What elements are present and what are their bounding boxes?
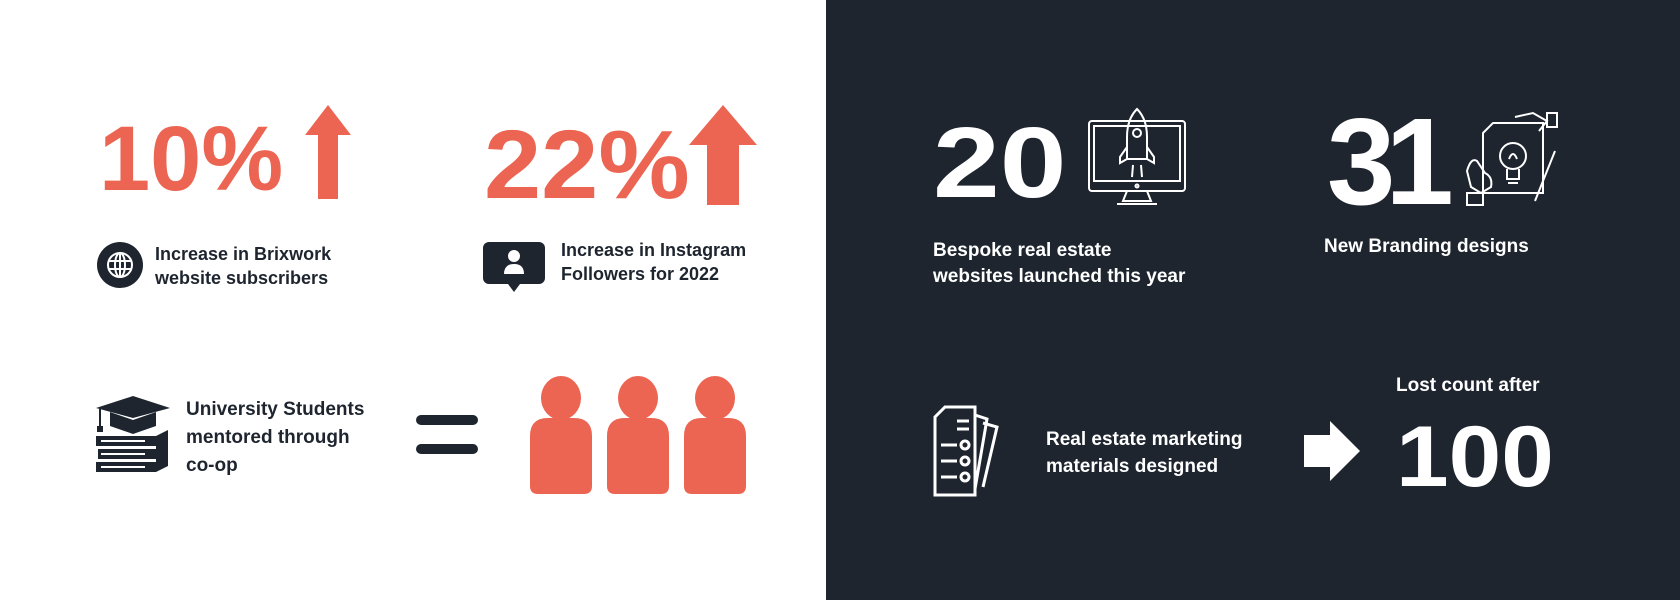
icon: three people bbox=[530, 376, 746, 494]
text: website subscribers bbox=[155, 244, 332, 288]
text: university students: University Students bbox=[186, 399, 364, 420]
arrow up 2 bbox=[689, 105, 757, 205]
text: bespoke websites bbox=[933, 240, 1186, 287]
text: new branding: New Branding designs bbox=[1324, 236, 1529, 257]
stat: 100: 100 bbox=[1396, 409, 1554, 505]
text: instagram followers bbox=[561, 240, 746, 284]
panel: dark right bbox=[826, 0, 1680, 600]
icon: monitor rocket bbox=[1088, 108, 1186, 205]
icon: documents bbox=[934, 406, 999, 496]
icon: instagram bubble bbox=[483, 242, 545, 292]
text: instagram followers: Followers for 2022 bbox=[561, 264, 719, 284]
text: bespoke websites: Bespoke real estate bbox=[933, 240, 1112, 261]
stat: 10%: 10% bbox=[99, 108, 283, 210]
text: lost count after: Lost count after bbox=[1396, 375, 1540, 396]
text: website subscribers: Increase in Brixwork bbox=[155, 244, 331, 264]
icon: graduation cap and books bbox=[96, 396, 170, 472]
text: university students: mentored through bbox=[186, 427, 350, 448]
text: marketing materials bbox=[1046, 429, 1242, 477]
arrow right bbox=[1304, 421, 1360, 481]
text: instagram followers: Increase in Instagram bbox=[561, 240, 746, 260]
arrow up 1 bbox=[305, 105, 351, 199]
text: university students: co-op bbox=[186, 455, 238, 476]
stat: 20: 20 bbox=[933, 107, 1066, 219]
stat: 31: 31 bbox=[1327, 94, 1444, 231]
text: university students bbox=[186, 399, 364, 476]
icon: branding hands bulb bbox=[1466, 112, 1558, 206]
text: bespoke websites: websites launched this year bbox=[933, 266, 1185, 287]
text: website subscribers: website subscribers bbox=[155, 268, 328, 288]
icon: globe bbox=[97, 242, 143, 288]
icon: equals bbox=[416, 415, 478, 454]
stat: 22%: 22% bbox=[484, 110, 690, 219]
text: marketing materials: Real estate marketing bbox=[1046, 429, 1242, 450]
text: marketing materials: materials designed bbox=[1046, 456, 1218, 477]
